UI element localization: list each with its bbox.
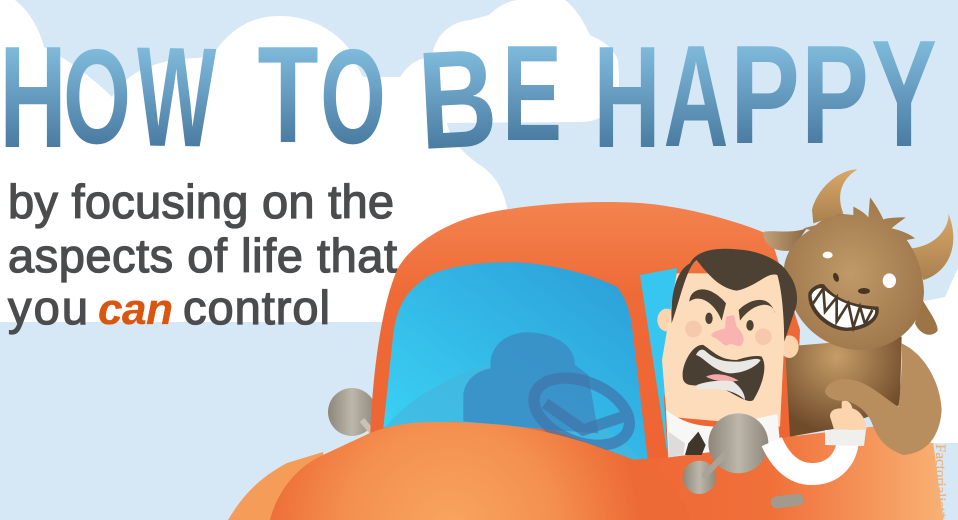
door handle (770, 493, 805, 509)
driver cheeks (685, 321, 772, 345)
hood (270, 422, 692, 520)
subtitle: aspects of life that (8, 229, 397, 282)
driver eyes (705, 313, 754, 331)
monster mouth (808, 284, 879, 331)
title: E (502, 17, 562, 170)
car roof and cab (370, 202, 800, 470)
driver right ear (780, 335, 799, 358)
driver arm (772, 438, 848, 474)
monster left ear (764, 228, 807, 251)
monster torso (785, 337, 902, 437)
title: P (730, 17, 800, 174)
monster right ear (915, 298, 938, 335)
subtitle: control (183, 281, 330, 334)
door (600, 427, 943, 520)
monster eyes (823, 252, 896, 288)
title: H (593, 16, 661, 178)
monster nose (832, 272, 870, 294)
windshield (383, 262, 648, 465)
driver seat shadow (463, 332, 598, 433)
steering wheel shadow (524, 365, 639, 458)
title: Y (871, 9, 937, 179)
side window (640, 268, 677, 458)
dashboard inside car (385, 363, 648, 465)
driver left ear (657, 309, 676, 331)
subtitle: you (8, 281, 88, 334)
right white cloud (880, 268, 958, 450)
car mirror (328, 388, 376, 436)
monster right horn (912, 213, 953, 280)
driver (657, 249, 942, 494)
title: W (135, 16, 218, 177)
main white cloud (0, 0, 619, 322)
subtitle: by focusing on the (8, 175, 394, 228)
title (0, 9, 937, 179)
shirt cuff (825, 429, 866, 446)
driver eyebrows (689, 289, 775, 321)
driver shirt and tie (666, 410, 780, 457)
title: O (320, 21, 386, 172)
subtitle: can (98, 285, 173, 334)
title: B (415, 21, 500, 179)
Factorialist credit: Factorialist* (932, 444, 948, 519)
driver hand (830, 401, 867, 429)
monster left horn (812, 169, 857, 223)
driver nose (711, 315, 744, 346)
car (228, 202, 943, 520)
steering column (683, 453, 726, 494)
fender (228, 452, 330, 520)
title: H (0, 16, 67, 178)
monster head (784, 197, 924, 350)
driver hair (671, 249, 797, 342)
title: O (63, 22, 131, 173)
title: P (801, 16, 869, 173)
subtitle (8, 175, 397, 334)
title: T (257, 17, 319, 172)
monster arm (825, 343, 942, 455)
steering wheel (708, 413, 768, 473)
title: A (664, 15, 728, 177)
monster (764, 169, 953, 437)
driver mouth (683, 345, 764, 401)
driver face (662, 273, 787, 427)
